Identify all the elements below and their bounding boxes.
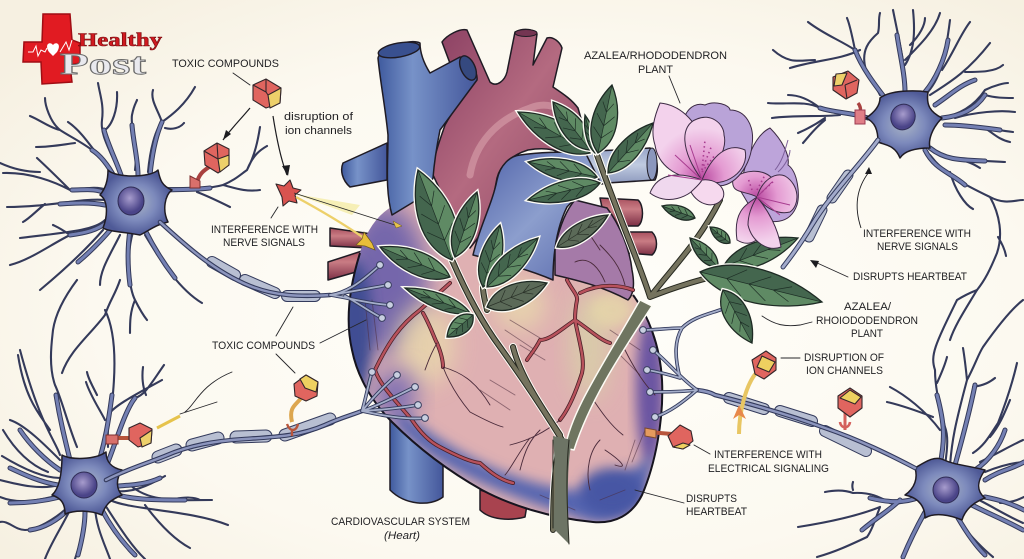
red cross	[23, 14, 80, 84]
toxin: lower right axon	[838, 388, 862, 430]
leaves: left cluster	[375, 164, 551, 344]
labels: right side: AZALEA/	[844, 301, 892, 313]
labels: left and center: ion channels	[285, 125, 353, 137]
labels: right side: HEARTBEAT	[686, 506, 747, 518]
labels: right side	[584, 50, 971, 518]
toxin: lower left axon	[287, 375, 318, 436]
vena cava	[342, 143, 387, 187]
labels: left and center: disruption of	[284, 111, 354, 123]
soma	[905, 458, 985, 520]
toxin: star and yellow signal	[276, 180, 402, 250]
flower: right bloom	[733, 128, 798, 248]
hatching	[365, 300, 645, 510]
logo: Healthy Post	[23, 14, 163, 84]
labels: right side: INTERFERENCE WITH	[863, 228, 971, 240]
myelin sheath	[212, 262, 315, 296]
terminal bulbs: heart-side synapses	[369, 262, 658, 421]
labels: left and center: INTERFERENCE WITH	[211, 224, 318, 236]
labels: left and center: CARDIOVASCULAR SYSTEM	[331, 516, 470, 528]
neuron: top right	[768, 10, 1023, 340]
pipes: right vessels	[600, 198, 642, 226]
toxin: top center hexagon	[253, 79, 281, 108]
labels: right side: AZALEA/RHODODENDRON	[584, 50, 727, 62]
arrows and leader lines	[223, 73, 872, 503]
flower: left bloom	[650, 103, 753, 205]
left atrium	[555, 200, 633, 300]
soma	[100, 170, 172, 235]
axon	[697, 390, 915, 468]
heart	[328, 29, 670, 530]
toxin: lower left soma	[106, 372, 232, 447]
neuron: bottom right	[697, 290, 1024, 557]
stems	[452, 155, 730, 544]
toxin: heart edge	[645, 425, 693, 449]
labels: left and center: TOXIC COMPOUNDS	[172, 58, 279, 70]
axon	[160, 222, 330, 296]
pipes: bottom vessels	[390, 420, 443, 503]
toxin: lower right yellow stalk	[733, 351, 776, 434]
logo: Healthy Post: Post	[60, 46, 147, 81]
pulmonary artery	[473, 152, 600, 280]
labels: right side: PLANT	[851, 328, 883, 340]
toxin: top right neuron	[833, 71, 865, 124]
labels: left and center	[172, 58, 470, 542]
aorta arch	[433, 29, 590, 248]
axon terminals on heart	[330, 265, 720, 418]
leaves: upper cluster	[512, 82, 661, 254]
leaves: right cluster	[660, 200, 826, 349]
axon	[106, 411, 362, 480]
logo: Healthy Post: Healthy	[78, 30, 163, 51]
coronary arteries	[375, 280, 655, 490]
axon	[783, 140, 878, 267]
labels: right side: ELECTRICAL SIGNALING	[708, 463, 829, 475]
labels: left and center: (Heart)	[384, 530, 420, 542]
labels: right side: DISRUPTS	[686, 493, 737, 505]
labels: left and center: NERVE SIGNALS	[223, 237, 305, 249]
neuron: bottom left	[0, 280, 362, 559]
labels: right side: INTERFERENCE WITH	[714, 449, 822, 461]
labels: right side: ION CHANNELS	[806, 365, 883, 377]
labels: right side: NERVE SIGNALS	[877, 241, 958, 253]
soma	[52, 452, 122, 515]
myelin sheath	[729, 398, 866, 451]
labels: right side: PLANT	[638, 64, 673, 76]
neuron: top left	[0, 83, 330, 333]
pipes: left veins	[330, 228, 372, 248]
labels: left and center: TOXIC COMPOUNDS	[212, 340, 315, 352]
labels: right side: DISRUPTS HEARTBEAT	[853, 271, 967, 283]
toxin: bound to top-left neuron	[190, 143, 229, 188]
right blue pipe	[560, 148, 657, 190]
myelin sheath	[158, 419, 330, 457]
heartbeat	[28, 40, 72, 56]
labels: right side: DISRUPTION OF	[804, 352, 884, 364]
soma	[866, 91, 942, 158]
ventricle body	[350, 203, 662, 522]
labels: right side: RHOIODODENDRON	[816, 315, 918, 327]
plant	[375, 82, 826, 544]
myelin sheath	[809, 175, 848, 237]
